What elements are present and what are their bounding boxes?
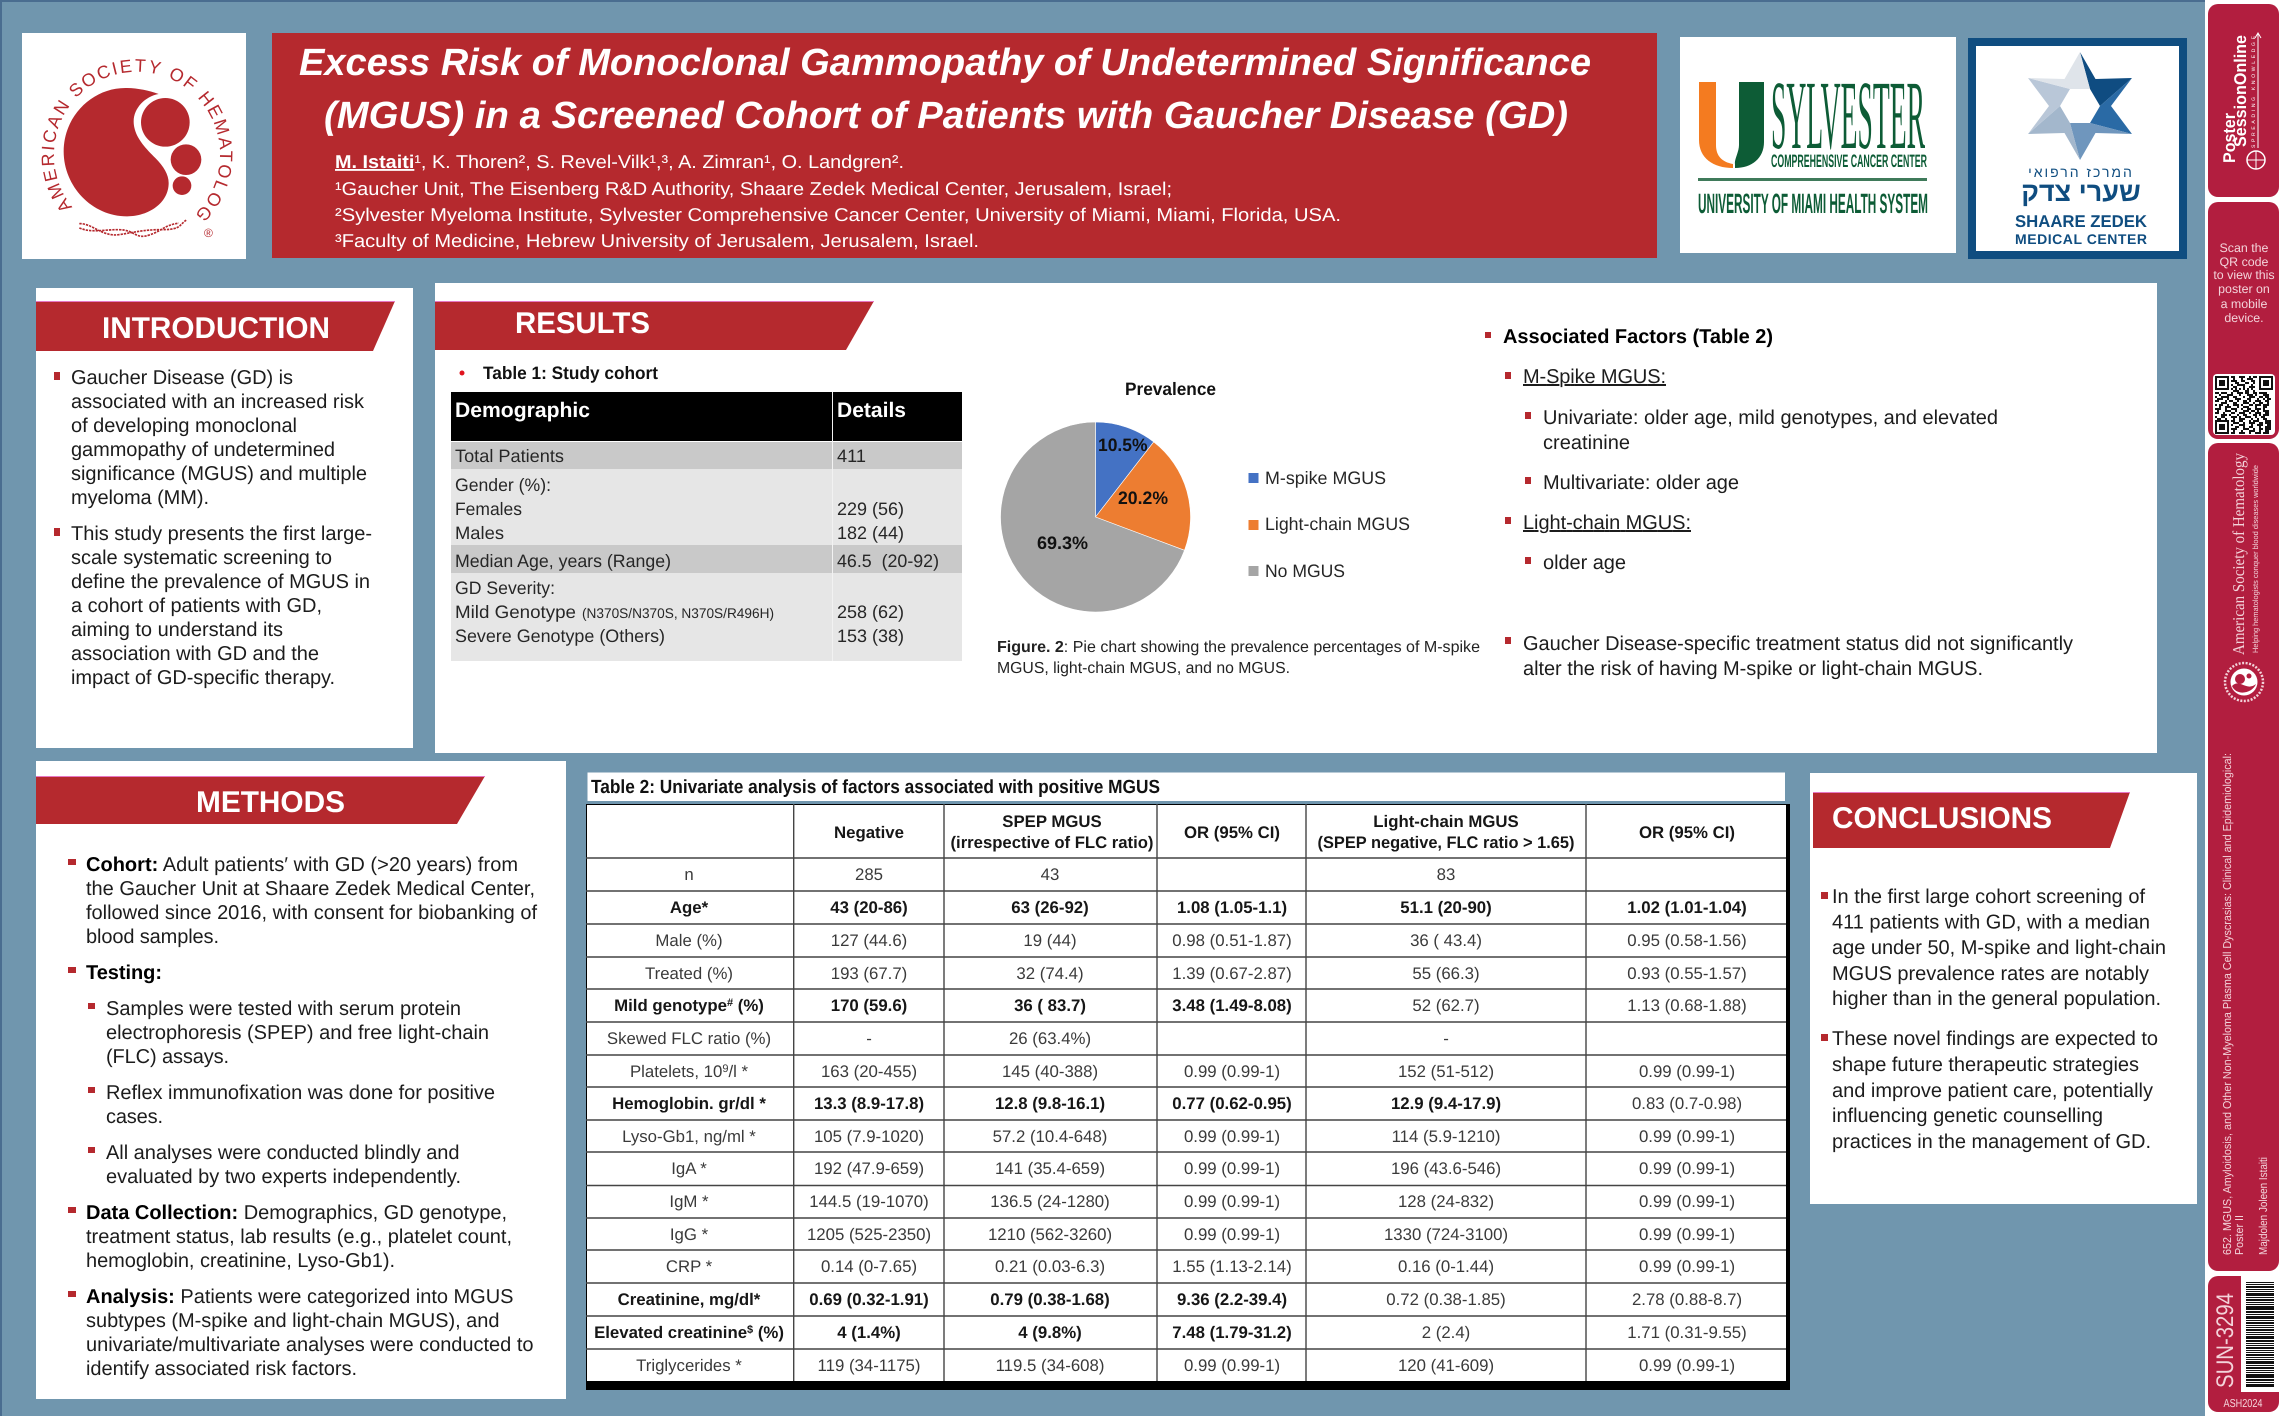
heading: results: RESULTS bbox=[515, 307, 650, 340]
row: male bbox=[655, 931, 1747, 950]
text: society tagline: Helping hematologists conquer blood diseases worldwide bbox=[2251, 465, 2260, 653]
text: testing: All analyses were conducted blindly and bbox=[106, 1142, 460, 1164]
table 2 header: OR (95% CI) bbox=[1184, 823, 1280, 842]
table 2 title: Table 2: Univariate analysis of factors associated with positive MGUS bbox=[591, 777, 1160, 798]
row: CRP: 1.55 (1.13-2.14) bbox=[1172, 1257, 1292, 1276]
text: scan instruction: poster on bbox=[2218, 282, 2270, 296]
text: conclusion 1 bbox=[1821, 886, 2166, 1010]
row: IgG: 1210 (562-3260) bbox=[988, 1225, 1112, 1244]
row: creatinine: 0.72 (0.38-1.85) bbox=[1386, 1290, 1506, 1309]
row: IgG bbox=[670, 1225, 1735, 1244]
title bbox=[299, 42, 1591, 137]
table 1 rows: Severe Genotype (Others) bbox=[455, 626, 665, 646]
text: poster number: SUN-3294 bbox=[2212, 1293, 2239, 1388]
panel: American Society of Hematology and session details bbox=[2208, 443, 2279, 1271]
text: associated factors: M-Spike MGUS: bbox=[1523, 366, 1666, 388]
logo: Shaare Zedek Medical Center bbox=[1968, 38, 2187, 259]
pie legend: Light-chain MGUS bbox=[1265, 514, 1410, 534]
row: hemoglobin: 0.77 (0.62-0.95) bbox=[1172, 1094, 1292, 1113]
row: n: 83 bbox=[1437, 865, 1455, 884]
text: society name: American Society of Hematology bbox=[2229, 452, 2248, 655]
heading: introduction: INTRODUCTION bbox=[102, 312, 330, 345]
text: conclusion 1: age under 50, M-spike and light-chain bbox=[1832, 937, 2166, 959]
heading: methods: METHODS bbox=[196, 786, 345, 819]
row: skewed FLC ratio bbox=[607, 1029, 1449, 1048]
heading: conclusions bbox=[1813, 792, 2130, 848]
row: triglycerides: 120 (41-609) bbox=[1398, 1356, 1494, 1375]
text: analysis: univariate/multivariate analyses were conducted to bbox=[86, 1334, 534, 1356]
table 1 rows: (N370S/N370S, N370S/R496H) bbox=[582, 605, 774, 621]
title: Excess Risk of Monoclonal Gammopathy of Undetermined Significance bbox=[299, 42, 1591, 84]
text: testing: Reflex immunofixation was done for positive bbox=[106, 1082, 495, 1104]
text: treatment status finding bbox=[1505, 633, 2073, 680]
text: introduction bullet 2: scale systematic screening to bbox=[71, 547, 332, 569]
row: n: 285 bbox=[855, 865, 883, 884]
table 2 header: Light-chain MGUS bbox=[1373, 812, 1519, 831]
row: treated: 0.93 (0.55-1.57) bbox=[1627, 964, 1747, 983]
row: platelets: 0.99 (0.99-1) bbox=[1639, 1062, 1735, 1081]
row: treated: 1.39 (0.67-2.87) bbox=[1172, 964, 1292, 983]
text: conclusion 2: influencing genetic counselling bbox=[1832, 1105, 2103, 1127]
panel: PosterSessionOnline logo bbox=[2208, 4, 2279, 197]
row: IgM: 0.99 (0.99-1) bbox=[1639, 1192, 1735, 1211]
row: mild genotype: (%) bbox=[733, 996, 764, 1015]
text: analysis: identify associated risk factors. bbox=[86, 1358, 357, 1380]
row: elevated creatinine: 2 (2.4) bbox=[1422, 1323, 1470, 1342]
row: IgM: 0.99 (0.99-1) bbox=[1184, 1192, 1280, 1211]
table 1 rows: Median Age, years (Range) bbox=[455, 551, 671, 571]
text: testing: Testing: bbox=[86, 962, 162, 984]
table 1 header bbox=[455, 399, 906, 422]
row: hemoglobin: 12.9 (9.4-17.9) bbox=[1391, 1094, 1501, 1113]
table 2 header: OR (95% CI) bbox=[1639, 823, 1735, 842]
row: platelets: 152 (51-512) bbox=[1398, 1062, 1494, 1081]
table 1 header: Demographic bbox=[455, 399, 590, 422]
text: meeting: ASH2024 bbox=[2224, 1398, 2263, 1410]
row: n: 43 bbox=[1041, 865, 1059, 884]
row: skewed FLC ratio: - bbox=[866, 1029, 872, 1048]
row: CRP: 0.16 (0-1.44) bbox=[1398, 1257, 1494, 1276]
row: age: 63 (26-92) bbox=[1011, 898, 1089, 917]
row: IgA: 192 (47.9-659) bbox=[814, 1159, 924, 1178]
text: analysis: subtypes (M-spike and light-chain MGUS), and bbox=[86, 1310, 500, 1332]
row: IgA: 0.99 (0.99-1) bbox=[1639, 1159, 1735, 1178]
row: elevated creatinine: 4 (9.8%) bbox=[1018, 1323, 1082, 1342]
logo: American Society of Hematology bbox=[22, 33, 246, 259]
figure 2 caption: MGUS, light-chain MGUS, and no MGUS. bbox=[997, 660, 1290, 677]
row: skewed FLC ratio: 26 (63.4%) bbox=[1009, 1029, 1091, 1048]
text: introduction bullet 2: a cohort of patients with GD, bbox=[71, 595, 322, 617]
row: elevated creatinine: 7.48 (1.79-31.2) bbox=[1172, 1323, 1292, 1342]
text: associated factors: Multivariate: older age bbox=[1543, 472, 1739, 494]
row: skewed FLC ratio: Skewed FLC ratio (%) bbox=[607, 1029, 771, 1048]
logo: Shaare Zedek Medical Center: המרכז הרפואי bbox=[2028, 164, 2134, 180]
row: IgA: 196 (43.6-546) bbox=[1391, 1159, 1501, 1178]
icon: star of David bbox=[2028, 52, 2132, 160]
text: introduction bullet 1: gammopathy of undetermined bbox=[71, 439, 335, 461]
text: introduction bullet 2: association with GD and the bbox=[71, 643, 319, 665]
text: cohort: blood samples. bbox=[86, 926, 219, 948]
row: triglycerides: Triglycerides * bbox=[636, 1356, 742, 1375]
table 1 rows: Mild Genotype bbox=[455, 602, 576, 622]
panel: conclusions bbox=[1810, 773, 2197, 1204]
row: creatinine: 9.36 (2.2-39.4) bbox=[1177, 1290, 1287, 1309]
row: treated: 193 (67.7) bbox=[831, 964, 907, 983]
row: elevated creatinine: $ bbox=[747, 1324, 753, 1336]
row: mild genotype bbox=[614, 996, 1747, 1015]
row: treated: Treated (%) bbox=[645, 964, 733, 983]
row: hemoglobin: 13.3 (8.9-17.8) bbox=[814, 1094, 924, 1113]
row: mild genotype: 36 ( 83.7) bbox=[1014, 996, 1086, 1015]
text: scan instruction bbox=[2213, 241, 2275, 325]
text: treatment status finding: Gaucher Disease-specific treatment status did not significantly bbox=[1523, 633, 2073, 655]
text: data collection: hemoglobin, creatinine, Lyso-Gb1). bbox=[86, 1250, 395, 1272]
authors and affiliations: ²Sylvester Myeloma Institute, Sylvester Comprehensive Cancer Center, University of Miami, Miami, Florida, USA. bbox=[335, 204, 1341, 225]
row: platelets: Platelets, 10 bbox=[630, 1062, 722, 1081]
authors and affiliations: ¹Gaucher Unit, The Eisenberg R&D Authority, Shaare Zedek Medical Center, Jerusalem, Israel; bbox=[335, 178, 1172, 199]
table 2 title bbox=[588, 772, 1785, 801]
table 1 rows: GD Severity: bbox=[455, 578, 555, 598]
row: elevated creatinine: 4 (1.4%) bbox=[837, 1323, 901, 1342]
pie legend: M-spike MGUS bbox=[1265, 468, 1386, 488]
text: analysis bbox=[68, 1286, 534, 1380]
row: n: n bbox=[684, 865, 694, 884]
logo: Sylvester Comprehensive Cancer Center: COMPREHENSIVE CANCER CENTER bbox=[1771, 151, 1927, 171]
row: hemoglobin bbox=[612, 1094, 1742, 1113]
table 1 rows: 182 (44) bbox=[837, 523, 904, 543]
text: scan instruction: device. bbox=[2224, 311, 2264, 325]
row: creatinine: 0.79 (0.38-1.68) bbox=[990, 1290, 1110, 1309]
text: conclusion 1: 411 patients with GD, with a median bbox=[1832, 912, 2150, 934]
table 2 header: Negative bbox=[834, 823, 904, 842]
row: hemoglobin: 12.8 (9.8-16.1) bbox=[995, 1094, 1105, 1113]
row: platelets: 145 (40-388) bbox=[1002, 1062, 1098, 1081]
row: IgG: IgG * bbox=[670, 1225, 709, 1244]
row: platelets: 9 bbox=[722, 1063, 728, 1075]
text: conclusion 1: In the first large cohort screening of bbox=[1832, 886, 2145, 908]
figure 2 caption: Figure. 2: Pie chart showing the prevalence percentages of M-spike bbox=[997, 639, 1480, 656]
table 1 rows bbox=[455, 446, 939, 646]
table 1 rows: 411 bbox=[837, 446, 866, 466]
table 2 header bbox=[834, 812, 1735, 852]
text: cohort: Cohort: Adult patients′ with GD (>20 years) from bbox=[86, 854, 518, 876]
text: UNIVERSITY OF MIAMI HEALTH SYSTEM bbox=[1698, 188, 1928, 219]
row: creatinine: 2.78 (0.88-8.7) bbox=[1632, 1290, 1742, 1309]
table 1 rows: Total Patients bbox=[455, 446, 564, 466]
panel: poster number and barcode bbox=[2208, 1276, 2280, 1412]
row: IgA: IgA * bbox=[671, 1159, 707, 1178]
table 1 rows: 153 (38) bbox=[837, 626, 904, 646]
row: lyso-Gb1 bbox=[622, 1127, 1735, 1146]
table 1: study cohort bbox=[451, 392, 962, 661]
row: mild genotype: 170 (59.6) bbox=[831, 996, 907, 1015]
row: mild genotype: # bbox=[727, 997, 733, 1009]
icon: barcode bbox=[2246, 1282, 2274, 1387]
text: treatment status finding: alter the risk of having M-spike or light-chain MGUS. bbox=[1523, 658, 1983, 680]
text: introduction bullet 1: myeloma (MM). bbox=[71, 487, 209, 509]
row: platelets: /l * bbox=[728, 1062, 748, 1081]
row: IgM bbox=[669, 1192, 1735, 1211]
text: conclusion 2: These novel findings are expected to bbox=[1832, 1028, 2158, 1050]
pie value labels: 69.3% bbox=[1037, 533, 1088, 553]
logo: Shaare Zedek Medical Center: MEDICAL CENTER bbox=[2015, 231, 2147, 247]
pie chart: prevalence bbox=[1001, 379, 1410, 612]
heading: conclusions: CONCLUSIONS bbox=[1832, 802, 2052, 835]
row: male: 0.98 (0.51-1.87) bbox=[1172, 931, 1292, 950]
panel: PosterSessionOnline logo: SessionOnline bbox=[2231, 35, 2250, 147]
table 2 header: (irrespective of FLC ratio) bbox=[950, 833, 1154, 852]
text: scan instruction: QR code bbox=[2220, 255, 2269, 269]
row: lyso-Gb1: 114 (5.9-1210) bbox=[1392, 1127, 1500, 1146]
panel: introduction bbox=[36, 288, 413, 748]
row: lyso-Gb1: 105 (7.9-1020) bbox=[814, 1127, 924, 1146]
text: introduction bullet 2: aiming to understand its bbox=[71, 619, 283, 641]
text: introduction bullet 1: significance (MGUS) and multiple bbox=[71, 463, 367, 485]
text: testing: Samples were tested with serum protein bbox=[106, 998, 461, 1020]
row: age: 51.1 (20-90) bbox=[1400, 898, 1492, 917]
row: age: 43 (20-86) bbox=[830, 898, 908, 917]
text: scan instruction: to view this bbox=[2213, 268, 2275, 282]
table 2 header: (SPEP negative, FLC ratio > 1.65) bbox=[1318, 833, 1574, 852]
row: triglycerides: 119.5 (34-608) bbox=[996, 1356, 1104, 1375]
text: conclusion 2: practices in the management of GD. bbox=[1832, 1131, 2151, 1153]
logo: American Society of Hematology: ® bbox=[204, 226, 213, 240]
row: male: Male (%) bbox=[655, 931, 723, 950]
text: introduction bullet 1 bbox=[54, 367, 367, 509]
table 1 rows: 46.5 (20-92) bbox=[837, 551, 939, 571]
icon: QR code bbox=[2213, 374, 2275, 435]
text: cohort: followed since 2016, with consent for biobanking of bbox=[86, 902, 537, 924]
row: IgM: IgM * bbox=[669, 1192, 709, 1211]
row: treated: 55 (66.3) bbox=[1412, 964, 1480, 983]
text: introduction bullet 2: This study presents the first large- bbox=[71, 523, 372, 545]
text: associated factors bbox=[1485, 326, 1998, 574]
row: creatinine: 0.69 (0.32-1.91) bbox=[809, 1290, 929, 1309]
row: creatinine: Creatinine, mg/dl* bbox=[618, 1290, 761, 1309]
row: CRP: CRP * bbox=[666, 1257, 713, 1276]
text: associated factors: Associated Factors (Table 2) bbox=[1503, 326, 1773, 348]
text: introduction bullet 1: of developing monoclonal bbox=[71, 415, 297, 437]
row: CRP: 0.14 (0-7.65) bbox=[821, 1257, 917, 1276]
row: IgA: 0.99 (0.99-1) bbox=[1184, 1159, 1280, 1178]
panel: QR code instructions bbox=[2208, 202, 2279, 439]
text: presenter: Majdolen Joleen Istaiti bbox=[2258, 1157, 2270, 1255]
text: poster session: Poster II bbox=[2234, 1215, 2246, 1255]
text: conclusion 2 bbox=[1821, 1028, 2158, 1153]
row: platelets bbox=[630, 1062, 1735, 1081]
panel: methods bbox=[36, 761, 566, 1399]
row: elevated creatinine: (%) bbox=[753, 1323, 784, 1342]
text: data collection: treatment status, lab results (e.g., platelet count, bbox=[86, 1226, 512, 1248]
text: testing: (FLC) assays. bbox=[106, 1046, 229, 1068]
text: conclusion 1: MGUS prevalence rates are notably bbox=[1832, 963, 2149, 985]
panel: results bbox=[435, 283, 2157, 753]
heading: results bbox=[435, 301, 874, 350]
table 1 header: Details bbox=[837, 399, 906, 422]
table 2: univariate analysis bbox=[586, 804, 1790, 1390]
panel: PosterSessionOnline logo: Poster bbox=[2220, 113, 2239, 163]
icon: society emblem bbox=[2225, 663, 2263, 701]
pie value labels: 20.2% bbox=[1118, 488, 1168, 508]
row: elevated creatinine: 1.71 (0.31-9.55) bbox=[1627, 1323, 1747, 1342]
row: mild genotype: 3.48 (1.49-8.08) bbox=[1172, 996, 1292, 1015]
text: testing: electrophoresis (SPEP) and free light-chain bbox=[106, 1022, 489, 1044]
row: treated: 32 (74.4) bbox=[1016, 964, 1084, 983]
text: scan instruction: Scan the bbox=[2220, 241, 2269, 255]
row: mild genotype: 1.13 (0.68-1.88) bbox=[1627, 996, 1747, 1015]
row: male: 19 (44) bbox=[1023, 931, 1077, 950]
row: IgG: 0.99 (0.99-1) bbox=[1639, 1225, 1735, 1244]
table 1 caption: Table 1: Study cohort bbox=[483, 363, 658, 383]
row: platelets: 163 (20-455) bbox=[821, 1062, 917, 1081]
row: triglycerides bbox=[636, 1356, 1735, 1375]
table 1 rows: 229 (56) bbox=[837, 499, 904, 519]
title: (MGUS) in a Screened Cohort of Patients with Gaucher Disease (GD) bbox=[324, 95, 1568, 137]
row: triglycerides: 0.99 (0.99-1) bbox=[1639, 1356, 1735, 1375]
text: introduction bullet 1: associated with an increased risk bbox=[71, 391, 365, 413]
row: IgM: 136.5 (24-1280) bbox=[990, 1192, 1110, 1211]
text: introduction bullet 2 bbox=[54, 523, 372, 689]
row: elevated creatinine: Elevated creatinine bbox=[594, 1323, 747, 1342]
row: elevated creatinine bbox=[594, 1323, 1747, 1342]
pie legend: No MGUS bbox=[1265, 561, 1345, 581]
row: IgG: 1330 (724-3100) bbox=[1384, 1225, 1508, 1244]
row: treated bbox=[645, 964, 1747, 983]
row: age: 1.02 (1.01-1.04) bbox=[1627, 898, 1747, 917]
heading: methods bbox=[36, 776, 485, 824]
row: IgG: 1205 (525-2350) bbox=[807, 1225, 931, 1244]
authors and affiliations: ³Faculty of Medicine, Hebrew University of Jerusalem, Jerusalem, Israel. bbox=[335, 230, 979, 251]
row: IgM: 144.5 (19-1070) bbox=[809, 1192, 929, 1211]
authors and affiliations: M. Istaiti ¹, K. Thoren², S. Revel-Vilk¹,³, A. Zimran¹, O. Landgren². bbox=[335, 151, 904, 172]
pie value labels bbox=[1037, 435, 1168, 553]
text: conclusion 2: and improve patient care, potentially bbox=[1832, 1080, 2153, 1102]
row: IgM: 128 (24-832) bbox=[1398, 1192, 1494, 1211]
sidebar: poster session kiosk strip bbox=[2205, 0, 2283, 1416]
logo: Sylvester Comprehensive Cancer Center bbox=[1680, 37, 1956, 253]
logo: Shaare Zedek Medical Center: SHAARE ZEDEK bbox=[2015, 212, 2148, 231]
row: CRP: 0.21 (0.03-6.3) bbox=[995, 1257, 1105, 1276]
text: scan instruction: a mobile bbox=[2221, 297, 2268, 311]
row: age: 1.08 (1.05-1.1) bbox=[1177, 898, 1287, 917]
text: data collection: Data Collection: Demographics, GD genotype, bbox=[86, 1202, 507, 1224]
row: lyso-Gb1: Lyso-Gb1, ng/ml * bbox=[622, 1127, 756, 1146]
table 1 rows: Males bbox=[455, 523, 504, 543]
text: session title: 652. MGUS, Amyloidosis, and Other Non-Myeloma Plasma Cell Dyscrasias: Clinical and Epidemiological: bbox=[2222, 753, 2234, 1255]
row: platelets: 0.99 (0.99-1) bbox=[1184, 1062, 1280, 1081]
row: mild genotype: Mild genotype bbox=[614, 996, 727, 1015]
panel: PosterSessionOnline logo: SPREADING KNOWLEDGE bbox=[2251, 35, 2257, 148]
table 1 rows: Gender (%): bbox=[455, 475, 551, 495]
title banner bbox=[272, 33, 1657, 258]
table 2 header: SPEP MGUS bbox=[1002, 812, 1102, 831]
row: IgG: 0.99 (0.99-1) bbox=[1184, 1225, 1280, 1244]
row: triglycerides: 0.99 (0.99-1) bbox=[1184, 1356, 1280, 1375]
text: cohort: the Gaucher Unit at Shaare Zedek Medical Center, bbox=[86, 878, 535, 900]
row: CRP bbox=[666, 1257, 1735, 1276]
table 1 rows: Females bbox=[455, 499, 522, 519]
row: male: 36 ( 43.4) bbox=[1410, 931, 1482, 950]
text: data collection bbox=[68, 1202, 512, 1272]
row: skewed FLC ratio: - bbox=[1443, 1029, 1449, 1048]
text: testing: cases. bbox=[106, 1106, 163, 1128]
text: associated factors: Univariate: older age, mild genotypes, and elevated bbox=[1543, 407, 1998, 429]
row: male: 127 (44.6) bbox=[831, 931, 907, 950]
text: introduction bullet 1: Gaucher Disease (GD) is bbox=[71, 367, 293, 389]
text: introduction bullet 2: define the prevalence of MGUS in bbox=[71, 571, 370, 593]
chart title: Prevalence bbox=[1125, 379, 1216, 399]
row: male: 0.95 (0.58-1.56) bbox=[1627, 931, 1747, 950]
row: triglycerides: 119 (34-1175) bbox=[818, 1356, 920, 1375]
row: lyso-Gb1: 0.99 (0.99-1) bbox=[1639, 1127, 1735, 1146]
row: age: Age* bbox=[670, 898, 709, 917]
text: conclusion 1: higher than in the general population. bbox=[1832, 988, 2161, 1010]
row: lyso-Gb1: 57.2 (10.4-648) bbox=[993, 1127, 1107, 1146]
row: IgA: 141 (35.4-659) bbox=[995, 1159, 1105, 1178]
row: n bbox=[684, 865, 1455, 884]
pie legend bbox=[1248, 468, 1410, 581]
text: conclusion 2: shape future therapeutic strategies bbox=[1832, 1054, 2139, 1076]
text: testing: evaluated by two experts independently. bbox=[106, 1166, 461, 1188]
row: hemoglobin: 0.83 (0.7-0.98) bbox=[1632, 1094, 1742, 1113]
table 1 rows: 258 (62) bbox=[837, 602, 904, 622]
row: mild genotype: 52 (62.7) bbox=[1412, 996, 1480, 1015]
text: associated factors: Light-chain MGUS: bbox=[1523, 512, 1691, 534]
text: testing bbox=[68, 962, 495, 1188]
text: introduction bullet 2: impact of GD-specific therapy. bbox=[71, 667, 335, 689]
authors and affiliations bbox=[335, 151, 1341, 251]
text: analysis: Analysis: Patients were categorized into MGUS bbox=[86, 1286, 514, 1308]
pie value labels: 10.5% bbox=[1098, 435, 1148, 455]
logo: Shaare Zedek Medical Center: שערי צדק bbox=[2021, 177, 2141, 207]
text: associated factors: creatinine bbox=[1543, 432, 1630, 454]
row: CRP: 0.99 (0.99-1) bbox=[1639, 1257, 1735, 1276]
row: age bbox=[670, 898, 1747, 917]
row: IgA bbox=[671, 1159, 1735, 1178]
row: hemoglobin: Hemoglobin. gr/dl * bbox=[612, 1094, 766, 1113]
text: cohort bbox=[68, 854, 537, 948]
row: creatinine bbox=[618, 1290, 1742, 1309]
text: associated factors: older age bbox=[1543, 552, 1626, 574]
row: lyso-Gb1: 0.99 (0.99-1) bbox=[1184, 1127, 1280, 1146]
figure 2 caption bbox=[997, 639, 1480, 677]
heading: introduction bbox=[36, 301, 395, 351]
